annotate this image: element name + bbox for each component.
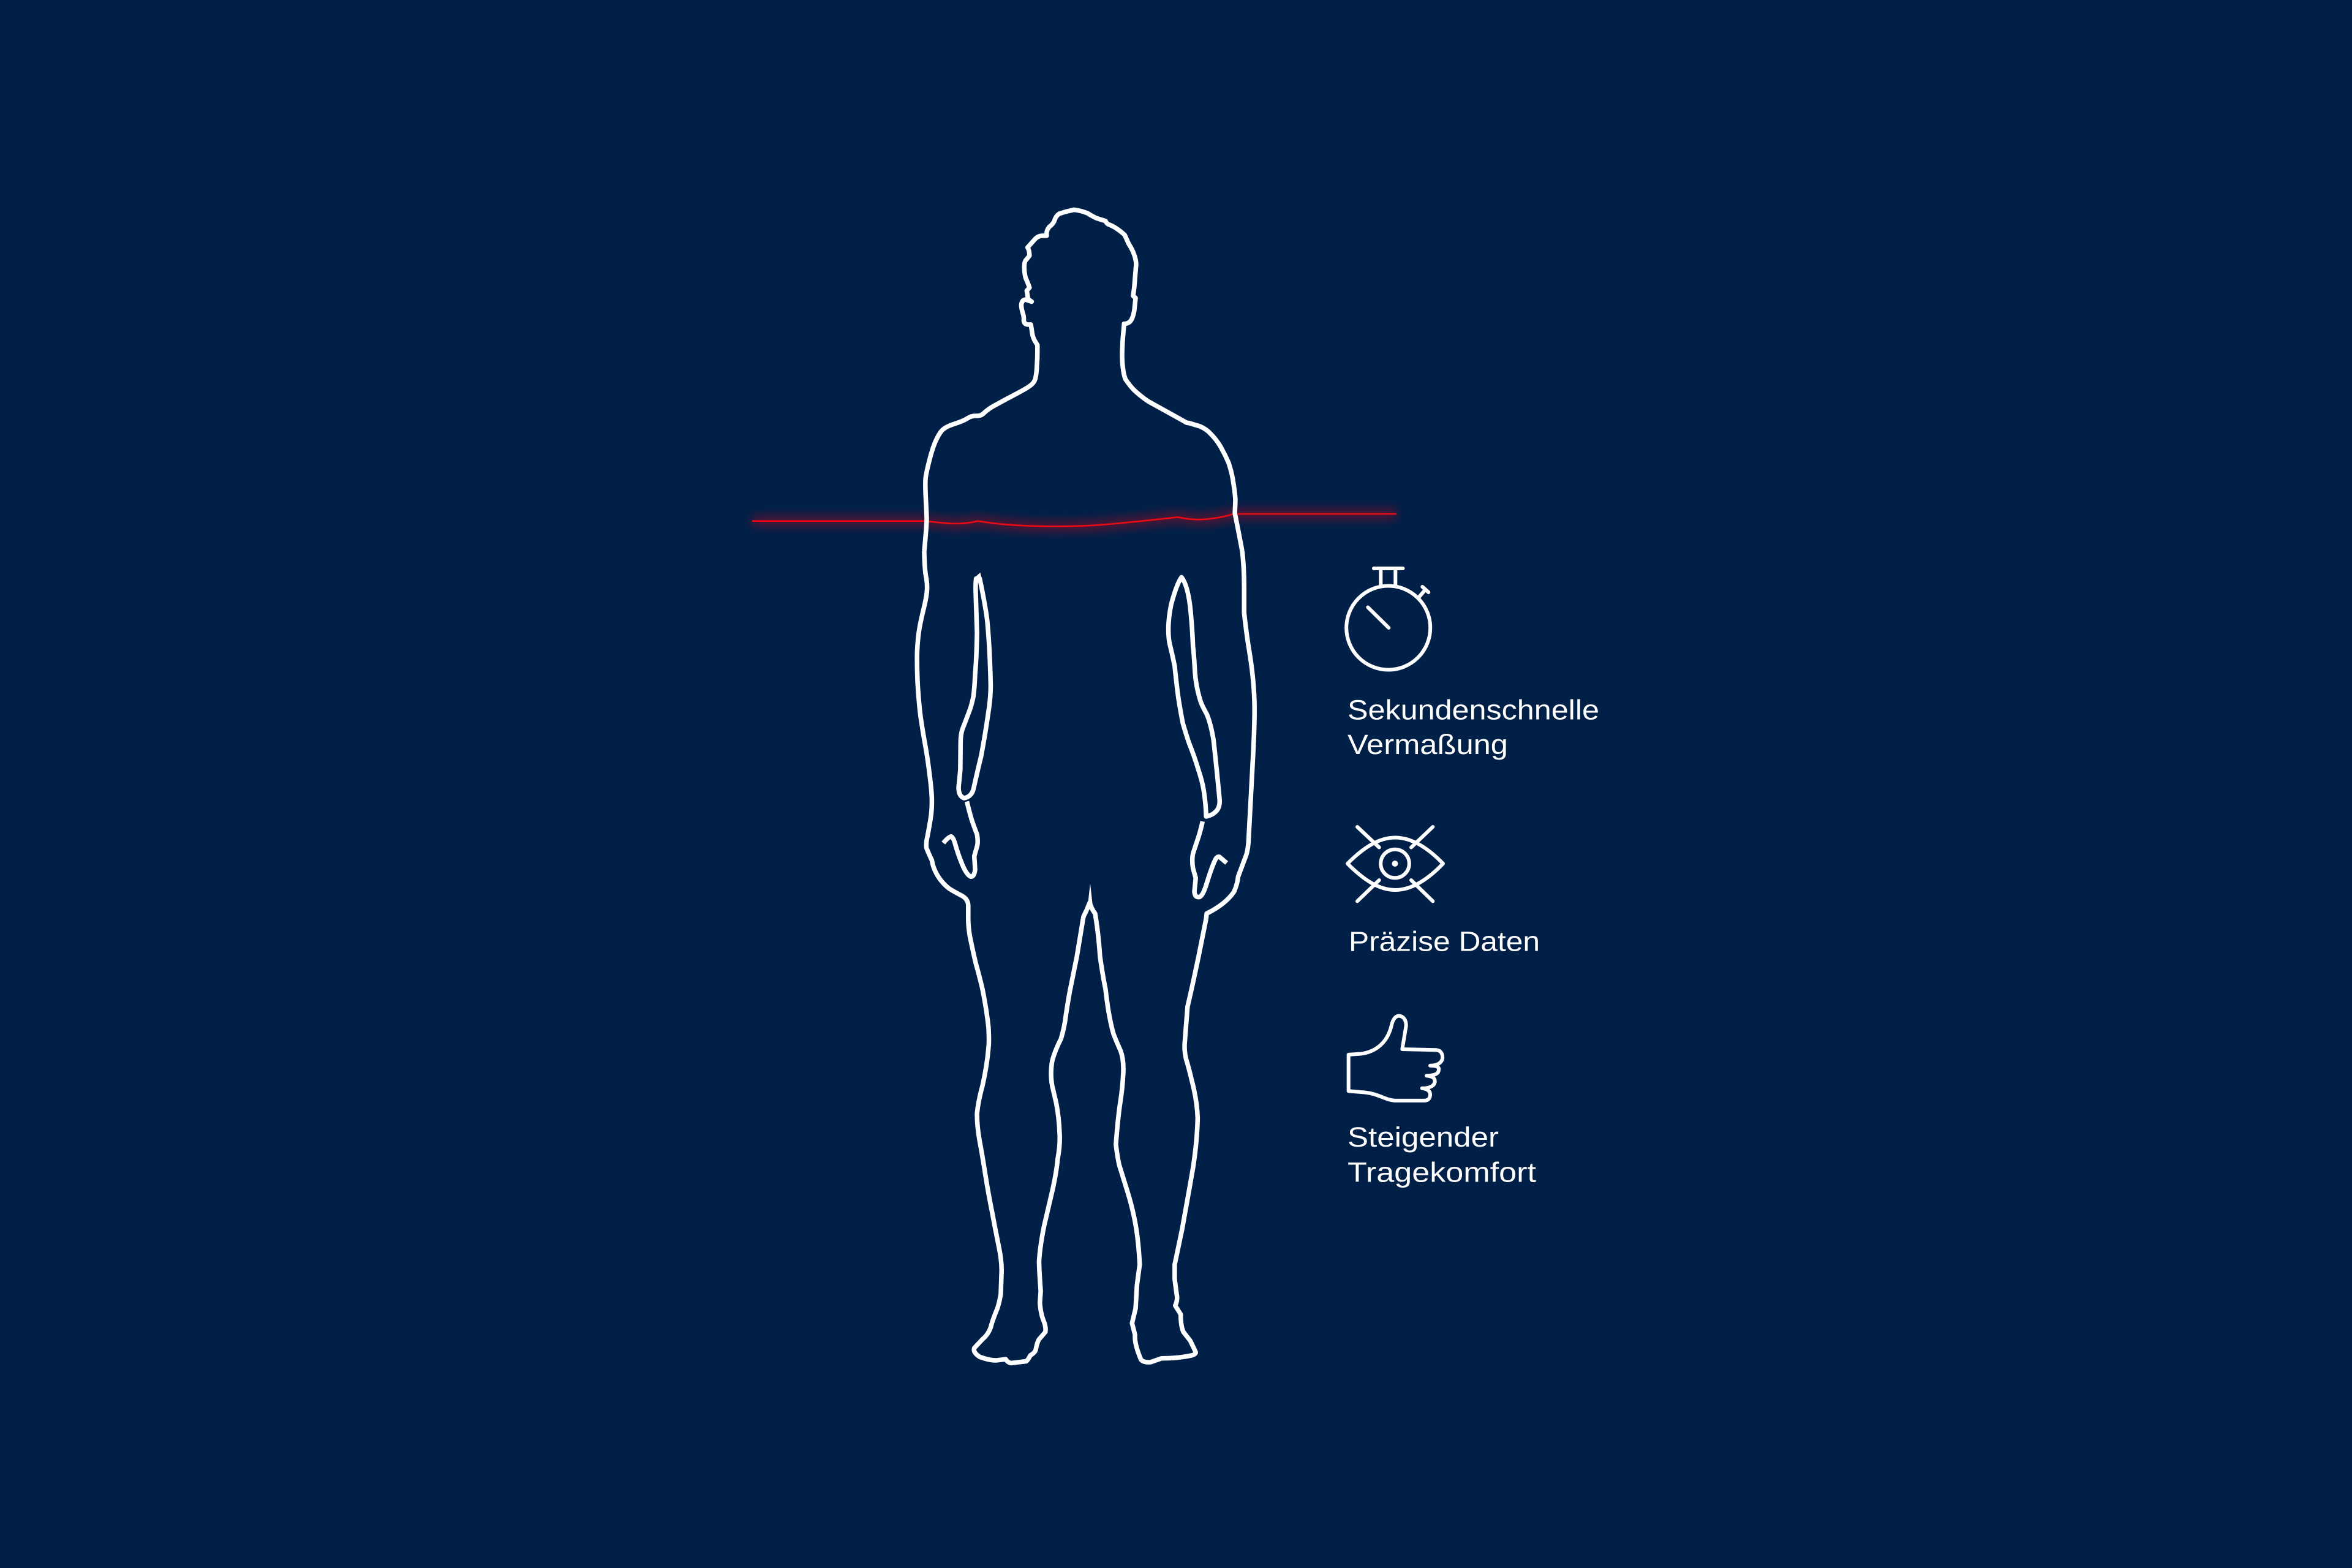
crotch [1083,903,1096,919]
crotch tip [1087,883,1093,908]
left outer arm and hip [917,551,968,919]
red line [752,514,1396,526]
right inner arm gap [1169,577,1219,816]
left hand [943,801,978,876]
left leg [968,919,1083,1363]
red glow [752,514,1396,526]
icon: stopwatch [1346,568,1430,670]
right leg [1096,919,1206,1362]
label: Steigender Tragekomfort: Tragekomfort [1348,1156,1537,1188]
head, shoulders and upper arms [924,209,1242,551]
icon: thumbs up [1349,1016,1442,1101]
human body outline [917,209,1254,1363]
right hand [1193,821,1227,897]
label: Sekundenschnelle Vermaßung: Vermaßung [1348,729,1508,760]
red measuring line with glow [752,514,1396,526]
left inner arm gap [959,579,990,798]
legs and feet [968,919,1206,1363]
label: Steigender Tragekomfort [1348,1121,1537,1188]
label: Sekundenschnelle Vermaßung [1348,695,1599,760]
right outer arm and hip [1206,551,1254,919]
icon: eye with rays [1348,827,1443,901]
label: Sekundenschnelle Vermaßung: Sekundenschnelle [1348,695,1599,725]
label: Steigender Tragekomfort: Steigender [1348,1121,1499,1153]
torso, arms and hands [917,551,1254,919]
label: Präzise Daten: Präzise Daten [1349,926,1540,957]
left arm tip [974,573,983,586]
